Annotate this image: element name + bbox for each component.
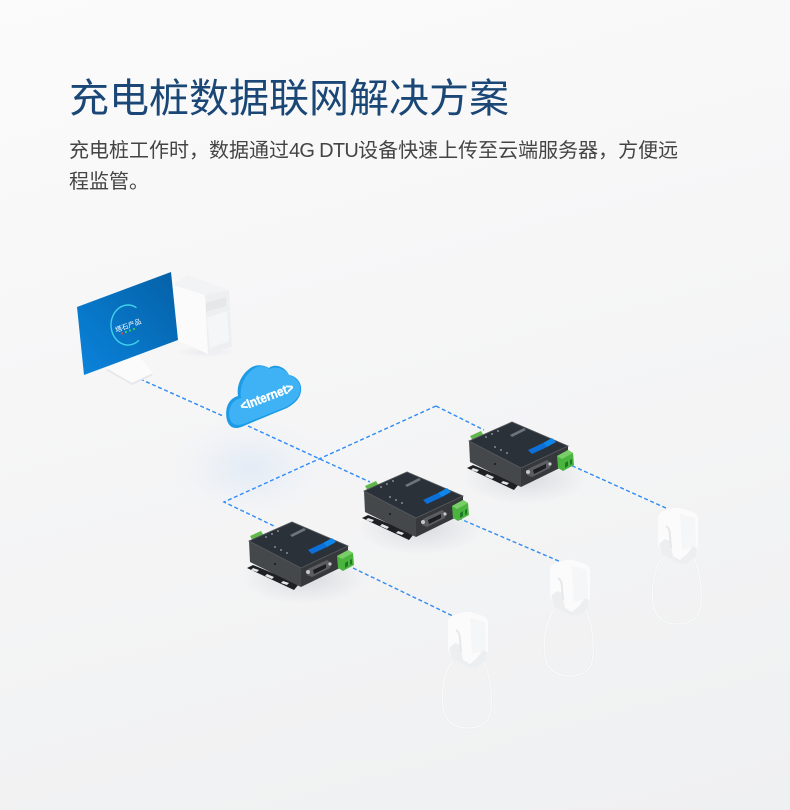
charger right <box>652 508 701 624</box>
screen logo ring <box>111 305 139 345</box>
description text: 充电桩工作时，数据通过4G DTU设备快速上传至云端服务器，方便远程监管。 <box>69 140 678 193</box>
cloud icon <box>226 365 301 428</box>
blue cloud glow <box>170 418 330 518</box>
monitor screen <box>77 272 178 375</box>
DTU device left <box>243 522 367 604</box>
charger middle <box>544 560 593 676</box>
screen logo text: 塔石产品 <box>114 317 143 334</box>
monitor stand <box>106 355 153 385</box>
cloud label: <Internet> <box>238 379 296 414</box>
screen status dots <box>121 328 135 335</box>
DTU device right <box>463 422 587 504</box>
server tower <box>173 275 237 358</box>
DTU device middle <box>358 472 482 554</box>
dashed connection lines <box>140 379 668 617</box>
charger left <box>442 612 491 728</box>
title: 充电桩数据联网解决方案 <box>69 77 509 121</box>
